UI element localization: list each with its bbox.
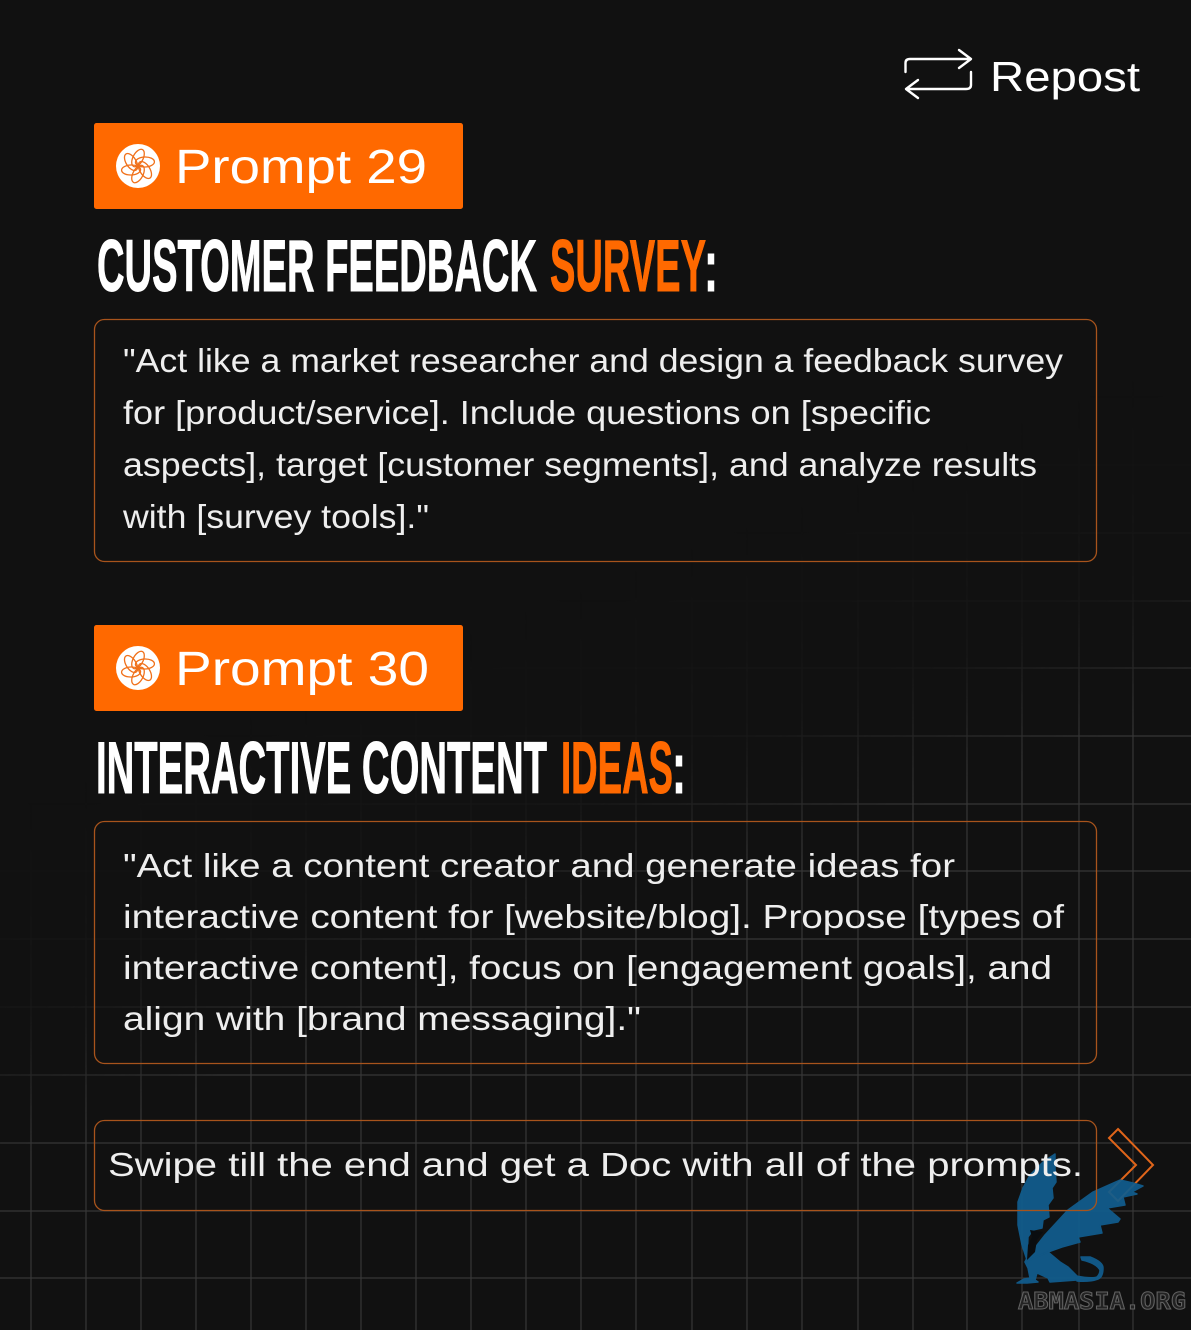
heading: customer feedback survey: SURVEY	[550, 226, 706, 307]
heading: interactive content ideas: INTERACTIVE CONTENT	[96, 728, 547, 809]
panel: prompt 29 text: "Act like a market researcher and design a feedback survey	[123, 342, 1064, 379]
panel: prompt 30 text	[94, 822, 1096, 1064]
panel: prompt 29 text: for [product/service]. Include questions on [specific	[123, 394, 931, 431]
prompt 29 badge	[94, 123, 463, 209]
heading: customer feedback survey: CUSTOMER FEEDBACK	[97, 226, 537, 307]
icon: next chevron	[1109, 1129, 1153, 1201]
icon: repost arrows	[906, 50, 971, 98]
panel: prompt 30 text: "Act like a content creator and generate ideas for	[123, 847, 955, 884]
panel: prompt 30 text: align with [brand messaging]."	[123, 1000, 641, 1037]
panel: swipe call to action	[94, 1120, 1096, 1210]
repost label: Repost	[990, 53, 1140, 100]
prompt 30 badge	[94, 625, 463, 711]
prompt 29 label: Prompt 29	[175, 141, 427, 194]
griffin head	[1027, 1230, 1043, 1260]
repost badge	[906, 50, 1140, 100]
watermark: griffin logo	[1017, 1154, 1143, 1283]
panel: prompt 29 text: aspects], target [customer segments], and analyze results	[123, 446, 1037, 483]
panel: prompt 29 text: with [survey tools]."	[122, 498, 429, 535]
panel: prompt 29 text	[94, 320, 1096, 562]
heading: interactive content ideas	[96, 728, 686, 809]
icon: chatgpt knot	[116, 144, 160, 188]
icon: chatgpt knot	[116, 646, 160, 690]
heading: interactive content ideas: :	[672, 728, 686, 809]
panel: prompt 30 text: interactive content], focus on [engagement goals], and	[123, 949, 1052, 986]
heading: customer feedback survey: :	[704, 226, 718, 307]
panel: swipe call to action: Swipe till the end and get a Doc with all of the prompts.	[108, 1146, 1083, 1183]
heading: interactive content ideas: IDEAS	[561, 728, 673, 809]
prompt 30 label: Prompt 30	[175, 643, 429, 696]
watermark: site name: ABMASIA.ORG	[1018, 1289, 1186, 1315]
panel: prompt 30 text: interactive content for [website/blog]. Propose [types of	[123, 898, 1065, 935]
